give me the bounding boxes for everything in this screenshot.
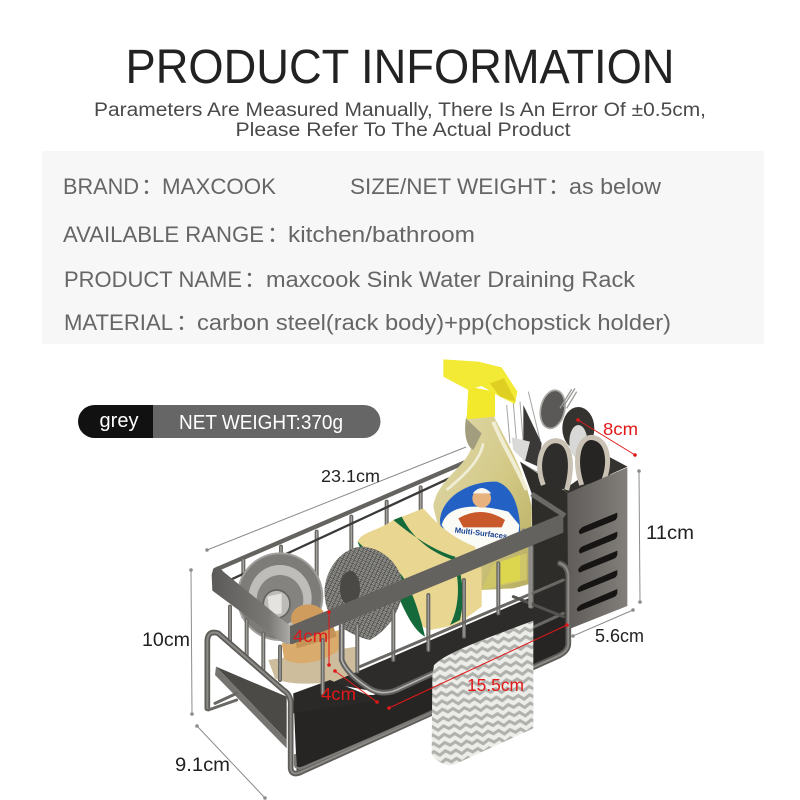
spec: size and net weight: SIZE/NET WEIGHT [350, 174, 547, 199]
spec: available range: kitchen/bathroom [288, 222, 475, 247]
spec: size and net weight: ： [548, 174, 570, 199]
bottle label text: Multi-Surfaces [454, 526, 508, 541]
dimension: rail height 4cm [293, 610, 331, 667]
spray head [443, 359, 517, 404]
title: PRODUCT INFORMATION [126, 41, 674, 94]
bottle label [440, 482, 520, 549]
sponge [358, 508, 482, 637]
spec: product name [64, 267, 636, 292]
spec: material: MATERIAL [64, 310, 173, 335]
spec: product name: maxcook Sink Water Draining Rack [266, 267, 636, 292]
dimension: holder width 8cm [576, 418, 638, 457]
sink strainer [238, 553, 322, 640]
dimension: height 10cm [142, 568, 194, 716]
cutlery [507, 388, 608, 490]
subtitle note: Please Refer To The Actual Product [236, 120, 571, 141]
spec: available range: ： [267, 222, 289, 247]
spec: product name: PRODUCT NAME [64, 267, 242, 292]
basket front wires [230, 547, 532, 693]
spec: product name: ： [244, 267, 266, 292]
spray neck and collar [467, 387, 495, 419]
dark base tray [215, 583, 567, 771]
panel: product specifications [42, 151, 764, 344]
wooden brush [268, 604, 357, 684]
subtitle note: Parameters Are Measured Manually, There Is An Error Of ±0.5cm, [94, 100, 706, 121]
steel wool [325, 547, 403, 640]
spec: brand: MAXCOOK [162, 174, 276, 199]
dimension: depth 9.1cm [175, 724, 267, 800]
dimension: holder height 11cm [637, 469, 694, 604]
spec: material: carbon steel(rack body)+pp(chopstick holder) [197, 310, 671, 335]
rack rear rim and back wires [215, 462, 467, 617]
spec: brand: ： [141, 174, 163, 199]
spec: size and net weight [350, 174, 661, 199]
dimension: holder depth 5.6cm: 5.6cm [595, 626, 644, 646]
spec: brand [63, 174, 276, 199]
spec: brand: BRAND [63, 174, 139, 199]
colour and net weight pill [78, 405, 381, 438]
spec: material: ： [176, 310, 198, 335]
dimension: towel rail 15.5cm [387, 623, 569, 710]
subtitle note [94, 100, 706, 141]
spec: available range [63, 222, 475, 247]
dimension: holder width 8cm: 8cm [603, 419, 638, 439]
dimension: depth 9.1cm: 9.1cm [175, 755, 230, 776]
pill label: net weight: NET WEIGHT:370g [179, 412, 343, 434]
spec: size and net weight: as below [569, 174, 661, 199]
dimension: holder height 11cm: 11cm [646, 523, 694, 544]
spec: available range: AVAILABLE RANGE [63, 222, 264, 247]
dimension: length 23.1cm [205, 447, 466, 552]
dimension: rail depth 4cm [321, 669, 379, 704]
hanging towel [432, 621, 533, 765]
product: sink draining rack [207, 359, 627, 774]
pill label: grey: grey [100, 410, 138, 432]
dimension: rail depth 4cm: 4cm [321, 684, 356, 704]
spray bottle [433, 359, 532, 590]
lower frame rails [207, 530, 568, 774]
cutlery box front face with drainage slots [567, 467, 627, 629]
dimension: towel rail 15.5cm: 15.5cm [467, 675, 524, 695]
dimension: holder depth 5.6cm [571, 608, 644, 646]
dimension: rail height 4cm: 4cm [293, 626, 328, 646]
dimension: height 10cm: 10cm [142, 630, 190, 651]
basket rim bands [212, 494, 565, 644]
cutlery box: side and interior [520, 457, 627, 629]
dimension: length 23.1cm: 23.1cm [321, 466, 380, 486]
